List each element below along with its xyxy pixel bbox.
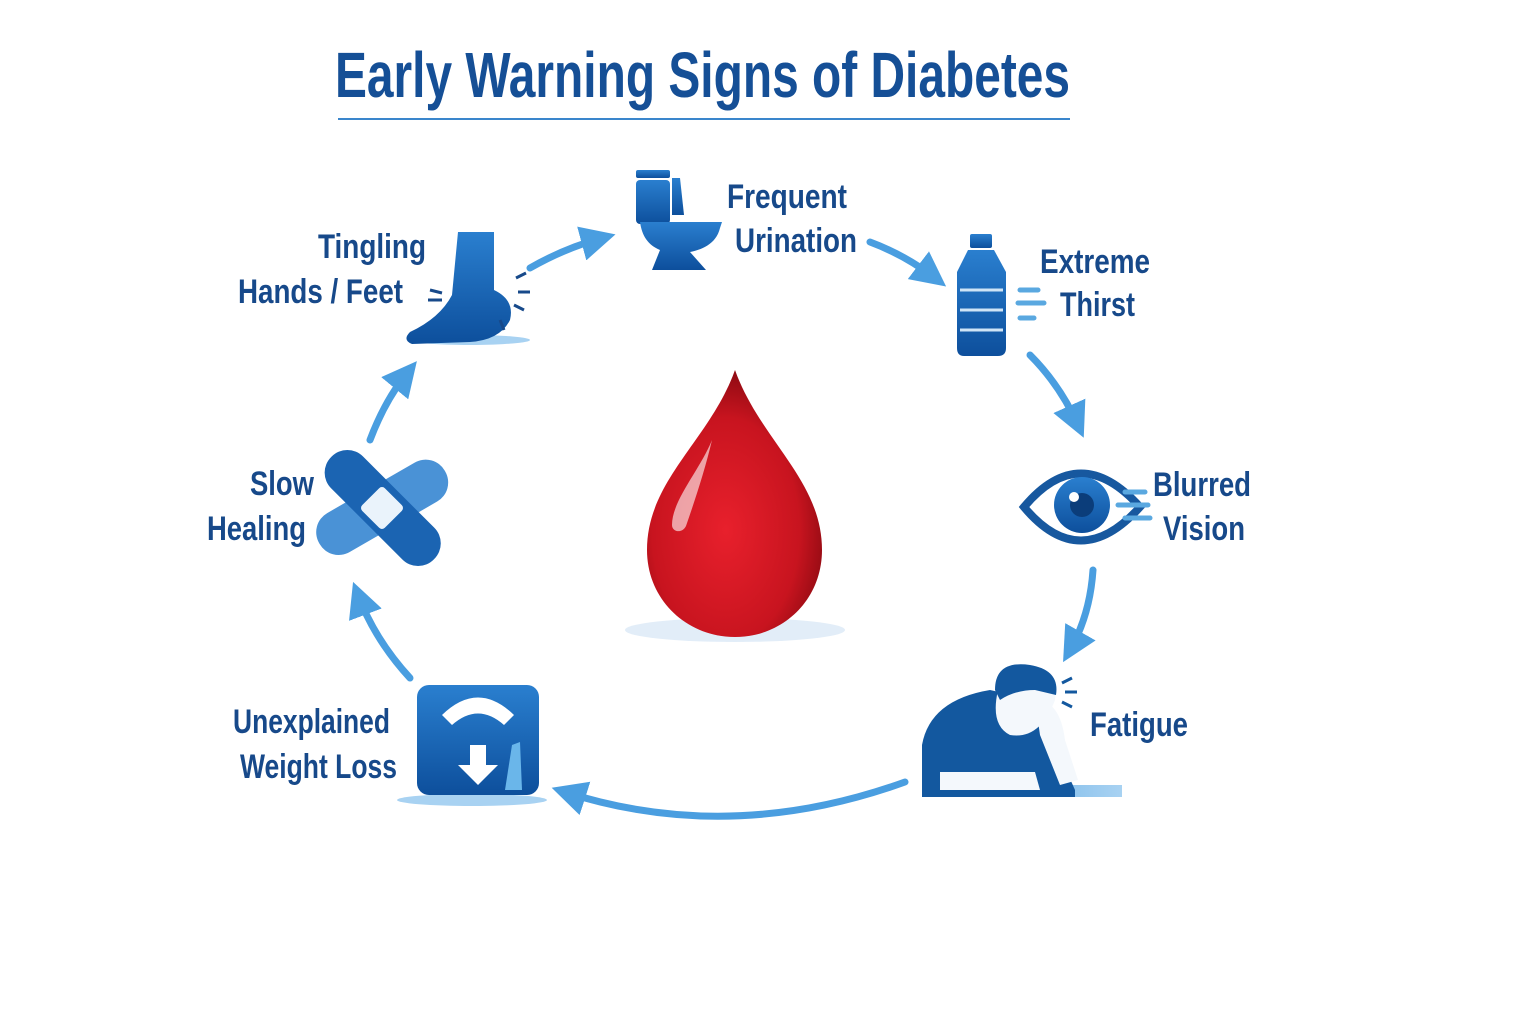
sign: tingling hands / feet: Tingling [318, 228, 426, 266]
sign: frequent urination: Urination [735, 222, 857, 260]
sign: slow healing: Slow [250, 465, 314, 503]
icon: water bottle [957, 234, 1044, 356]
arrow: vision to fatigue [1070, 570, 1093, 650]
arrow: fatigue to weight [565, 782, 905, 816]
arrow: healing to feet [370, 372, 408, 440]
arrow: weight to healing [358, 595, 410, 678]
title: Early Warning Signs of Diabetes [335, 39, 1070, 111]
icon: tired person [922, 664, 1122, 797]
sign: extreme thirst: Thirst [1060, 286, 1135, 324]
sign: unexplained weight loss: Weight Loss [240, 748, 397, 786]
sign: tingling hands / feet [238, 228, 530, 345]
sign: extreme thirst [957, 234, 1150, 356]
arrow: urination to thirst [870, 242, 935, 278]
sign: fatigue [922, 664, 1188, 797]
arrow: thirst to vision [1030, 355, 1078, 425]
sign: slow healing: Healing [207, 510, 306, 548]
sign: slow healing [207, 441, 456, 575]
sign: unexplained weight loss: Unexplained [233, 703, 390, 741]
blood drop [625, 370, 845, 642]
sign: blurred vision: Vision [1163, 510, 1245, 548]
sign: blurred vision [1024, 466, 1251, 548]
arrow: feet to toilet [530, 238, 602, 268]
sign: unexplained weight loss [233, 685, 547, 806]
icon: foot [406, 232, 530, 345]
icon: toilet [636, 170, 722, 270]
icon: scale [397, 685, 547, 806]
icon: eye [1024, 474, 1150, 540]
sign: frequent urination [636, 170, 857, 270]
sign: frequent urination: Frequent [727, 178, 847, 216]
sign: blurred vision: Blurred [1153, 466, 1251, 504]
sign: tingling hands / feet: Hands / Feet [238, 273, 403, 311]
sign: fatigue: Fatigue [1090, 706, 1188, 744]
arrows [358, 238, 1093, 816]
sign: extreme thirst: Extreme [1040, 243, 1150, 281]
icon: bandages [308, 441, 456, 575]
